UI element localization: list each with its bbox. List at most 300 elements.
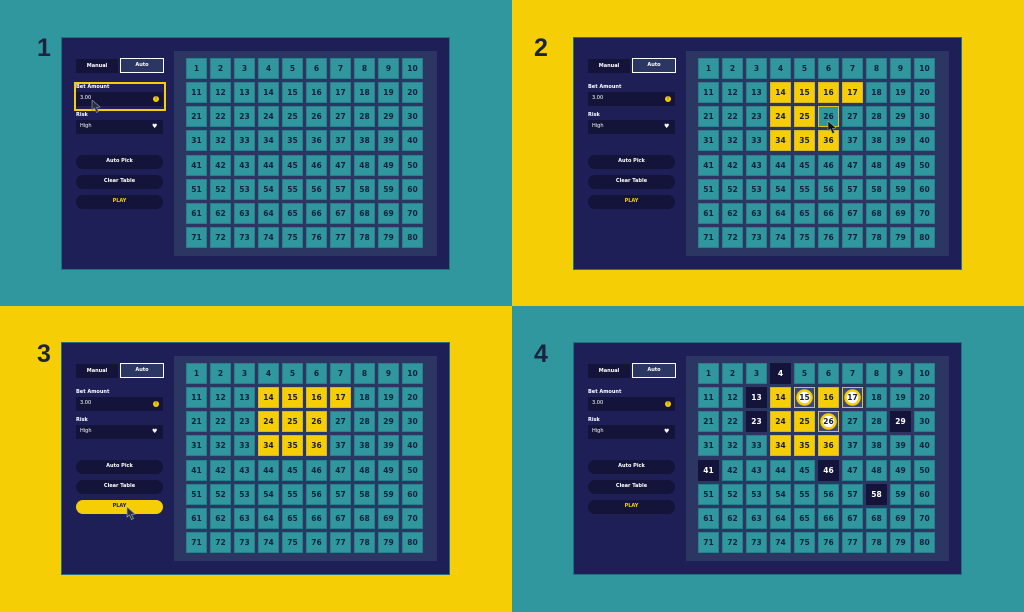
number board with selected numbers: 35 <box>287 441 298 450</box>
number board with drawn results: 32 <box>727 441 738 450</box>
number board with selected numbers: 51 <box>191 490 202 499</box>
number board: 19 <box>383 88 394 97</box>
number board with selected numbers: 41 <box>703 160 714 170</box>
number board: 69 <box>383 209 394 218</box>
number board with selected numbers: 2 <box>730 64 735 73</box>
number board: 64 <box>263 209 274 218</box>
number board: 62 <box>215 209 226 218</box>
number board with drawn results: 76 <box>823 538 834 547</box>
number board with selected numbers: 54 <box>263 490 274 499</box>
number board with drawn results: 59 <box>895 490 906 499</box>
play button: PLAY <box>625 198 638 204</box>
number board with drawn results: 54 <box>775 490 786 499</box>
number board with selected numbers: 62 <box>727 209 738 218</box>
number board with selected numbers: 21 <box>191 417 202 426</box>
number board with selected numbers: 10 <box>407 369 418 378</box>
clear table button <box>588 480 675 494</box>
auto pick button <box>76 155 163 168</box>
bet amount input: 3.00 <box>592 95 603 101</box>
number board with selected numbers: 74 <box>775 233 786 242</box>
number board with selected numbers: 31 <box>191 441 202 450</box>
number board with drawn results: 61 <box>703 514 714 523</box>
number board with selected numbers: 28 <box>359 417 370 426</box>
risk select: ♥ <box>152 123 157 130</box>
number board with selected numbers: 23 <box>751 112 762 121</box>
clear table button: Clear Table <box>616 178 647 184</box>
number board with drawn results: 13 <box>751 393 762 402</box>
number board: 78 <box>359 233 370 242</box>
number board with selected numbers: 4 <box>266 369 271 378</box>
number board with selected numbers: 36 <box>823 136 834 145</box>
number board with drawn results: 40 <box>919 441 930 450</box>
number board with selected numbers: 20 <box>407 393 418 402</box>
panel: step 2 game screen <box>574 38 961 269</box>
number board: 61 <box>191 209 202 218</box>
number board with drawn results: 18 <box>871 393 882 402</box>
number board with drawn results: 35 <box>799 441 810 450</box>
number board with drawn results: 4 <box>778 369 783 378</box>
number board: 12 <box>215 88 226 97</box>
number board with drawn results: 60 <box>919 490 930 499</box>
number board with drawn results: 74 <box>775 538 786 547</box>
auto tab <box>632 58 676 73</box>
number board: 33 <box>239 136 250 145</box>
number board with selected numbers: 67 <box>847 209 858 218</box>
number board: 8 <box>362 64 367 73</box>
number board: 17 <box>335 88 346 97</box>
number board with selected numbers: 75 <box>287 538 298 547</box>
number board with selected numbers: 34 <box>775 136 786 145</box>
number board: 51 <box>191 185 202 194</box>
number board with selected numbers: 17 <box>335 393 346 402</box>
risk select <box>588 425 675 438</box>
number board: 75 <box>287 233 298 242</box>
bet amount input <box>588 397 675 410</box>
number board with selected numbers: 16 <box>823 88 834 97</box>
number board: 46 <box>311 160 322 170</box>
number board: 37 <box>335 136 346 145</box>
number board: 59 <box>383 185 394 194</box>
number board with selected numbers: 4 <box>778 64 783 73</box>
number board with selected numbers: 42 <box>215 466 226 474</box>
auto tab <box>632 363 676 378</box>
number board: 16 <box>311 88 322 97</box>
number board with drawn results: 39 <box>895 441 906 450</box>
step number 3: 3 <box>37 340 51 368</box>
number board with selected numbers: 38 <box>359 441 370 450</box>
manual tab <box>588 59 630 73</box>
auto pick button <box>588 155 675 168</box>
number board with selected numbers: 33 <box>239 441 250 450</box>
number board with drawn results: 43 <box>751 466 762 474</box>
number board with selected numbers: 37 <box>847 136 858 145</box>
icon: mouse cursor <box>92 100 101 113</box>
number board with selected numbers: 23 <box>239 417 250 426</box>
step number 1: 1 <box>37 34 51 62</box>
number board <box>174 51 437 256</box>
number board: 10 <box>407 64 418 73</box>
bet amount label: Bet Amount <box>588 84 621 90</box>
number board with selected numbers: 46 <box>311 466 322 474</box>
number board: 35 <box>287 136 298 145</box>
manual tab <box>76 364 118 378</box>
number board with selected numbers: 55 <box>799 185 810 194</box>
number board with drawn results: 73 <box>751 538 762 547</box>
number board with drawn results: 1 <box>706 369 711 378</box>
number board with selected numbers <box>686 51 949 256</box>
number board with drawn results: 80 <box>919 538 930 547</box>
number board: 71 <box>191 233 202 242</box>
number board with drawn results: 78 <box>871 538 882 547</box>
number board with drawn results: 69 <box>895 514 906 523</box>
number board with drawn results: 38 <box>871 441 882 450</box>
number board with selected numbers: 6 <box>826 64 831 73</box>
number board with selected numbers: 27 <box>847 112 858 121</box>
number board with selected numbers: 35 <box>799 136 810 145</box>
clear table button <box>76 480 163 494</box>
number board with selected numbers: 15 <box>799 88 810 97</box>
number board with selected numbers: 49 <box>383 466 394 474</box>
number board: 31 <box>191 136 202 145</box>
number board with selected numbers: 14 <box>775 88 786 97</box>
number board: 41 <box>191 160 202 170</box>
number board with drawn results: 24 <box>775 417 786 426</box>
manual tab: Manual <box>599 63 619 69</box>
number board: 45 <box>287 160 298 170</box>
number board with selected numbers: 5 <box>802 64 807 73</box>
number board with selected numbers: 77 <box>335 538 346 547</box>
manual tab <box>76 59 118 73</box>
auto tab: Auto <box>647 367 661 373</box>
number board with drawn results: 27 <box>847 417 858 426</box>
number board with selected numbers: 34 <box>263 441 274 450</box>
bet amount label: Bet Amount <box>76 389 109 395</box>
number board: 3 <box>242 64 247 73</box>
number board: 48 <box>359 160 370 170</box>
number board with drawn results: 37 <box>847 441 858 450</box>
number board with selected numbers: 18 <box>359 393 370 402</box>
number board with selected numbers: 5 <box>290 369 295 378</box>
number board with selected numbers: 74 <box>263 538 274 547</box>
number board with selected numbers: 15 <box>287 393 298 402</box>
number board with drawn results: 66 <box>823 514 834 523</box>
number board with selected numbers: 37 <box>335 441 346 450</box>
number board: 76 <box>311 233 322 242</box>
number board: 67 <box>335 209 346 218</box>
number board with selected numbers: 56 <box>311 490 322 499</box>
number board with drawn results: 6 <box>826 369 831 378</box>
bet amount input: ! <box>667 96 669 102</box>
number board with drawn results: 34 <box>775 441 786 450</box>
number board with drawn results: 10 <box>919 369 930 378</box>
number board with selected numbers: 26 <box>311 417 322 426</box>
risk select <box>76 425 163 438</box>
number board with drawn results: 63 <box>751 514 762 523</box>
number board: 68 <box>359 209 370 218</box>
number board: 24 <box>263 112 274 121</box>
number board with drawn results: 58 <box>871 490 882 499</box>
number board: 52 <box>215 185 226 194</box>
number board with drawn results: 65 <box>799 514 810 523</box>
number board with drawn results: 7 <box>850 369 855 378</box>
number board with drawn results: 57 <box>847 490 858 499</box>
number board with drawn results: 68 <box>871 514 882 523</box>
number board with selected numbers: 33 <box>751 136 762 145</box>
auto tab: Auto <box>135 62 149 68</box>
number board with drawn results: 62 <box>727 514 738 523</box>
risk select: High <box>80 123 92 129</box>
number board with selected numbers: 63 <box>751 209 762 218</box>
number board with drawn results: 53 <box>751 490 762 499</box>
number board: 20 <box>407 88 418 97</box>
number board: 9 <box>386 64 391 73</box>
number board with selected numbers: 24 <box>263 417 274 426</box>
number board with drawn results: 30 <box>919 417 930 426</box>
number board with drawn results: 75 <box>799 538 810 547</box>
step number 2: 2 <box>534 34 548 62</box>
number board: 25 <box>287 112 298 121</box>
number board with selected numbers: 12 <box>727 88 738 97</box>
number board with selected numbers: 75 <box>799 233 810 242</box>
number board with selected numbers: 1 <box>194 369 199 378</box>
quadrant 3 background <box>0 306 512 612</box>
bet amount input: 3.00 <box>80 95 91 101</box>
number board with drawn results: 56 <box>823 490 834 499</box>
number board with selected numbers: 60 <box>919 185 930 194</box>
number board with selected numbers <box>174 356 437 561</box>
number board with drawn results: 28 <box>871 417 882 426</box>
number board: 54 <box>263 185 274 194</box>
number board with drawn results: 9 <box>898 369 903 378</box>
number board: 42 <box>215 160 226 170</box>
number board with selected numbers: 18 <box>871 88 882 97</box>
clear table button: Clear Table <box>616 483 647 489</box>
number board with selected numbers: 29 <box>895 112 906 121</box>
number board with drawn results: 55 <box>799 490 810 499</box>
number board with selected numbers: 8 <box>874 64 879 73</box>
number board with selected numbers: 6 <box>314 369 319 378</box>
number board: 47 <box>335 160 346 170</box>
number board: 43 <box>239 160 250 170</box>
bet amount input <box>76 397 163 410</box>
number board with selected numbers: 50 <box>919 160 930 170</box>
bet amount input: 3.00 <box>592 400 603 406</box>
auto pick button: Auto Pick <box>106 463 133 469</box>
number board with selected numbers: 46 <box>823 160 834 170</box>
number board: 72 <box>215 233 226 242</box>
number board with drawn results: 44 <box>775 466 786 474</box>
number board with selected numbers: 62 <box>215 514 226 523</box>
play button: PLAY <box>625 503 638 509</box>
number board: 14 <box>263 88 274 97</box>
clear table button: Clear Table <box>104 178 135 184</box>
panel: step 4 game screen <box>574 343 961 574</box>
number board with drawn results: 71 <box>703 538 714 547</box>
number board with selected numbers: 9 <box>386 369 391 378</box>
auto tab: Auto <box>135 367 149 373</box>
auto pick button <box>588 460 675 474</box>
number board with selected numbers: 29 <box>383 417 394 426</box>
number board: 15 <box>287 88 298 97</box>
number board with selected numbers: 48 <box>871 160 882 170</box>
bet amount input: 3.00 <box>80 400 91 406</box>
number board with selected numbers: 61 <box>191 514 202 523</box>
bet amount input: ! <box>667 401 669 407</box>
number board with selected numbers: 71 <box>191 538 202 547</box>
number board with drawn results: 50 <box>919 466 930 474</box>
number board with selected numbers: 65 <box>799 209 810 218</box>
number board: 23 <box>239 112 250 121</box>
number board with selected numbers: 21 <box>703 112 714 121</box>
number board with selected numbers: 52 <box>215 490 226 499</box>
number board with drawn results: 52 <box>727 490 738 499</box>
panel: step 3 game screen <box>62 343 449 574</box>
number board with selected numbers: 53 <box>239 490 250 499</box>
number board with selected numbers: 11 <box>191 393 202 402</box>
step number 4: 4 <box>534 340 548 368</box>
quadrant 2 background <box>512 0 1024 306</box>
number board with selected numbers: 32 <box>727 136 738 145</box>
auto pick button: Auto Pick <box>618 463 645 469</box>
risk select: High <box>592 123 604 129</box>
number board with selected numbers: 71 <box>703 233 714 242</box>
number board with selected numbers: 60 <box>407 490 418 499</box>
number board with drawn results: 79 <box>895 538 906 547</box>
number board with selected numbers: 43 <box>751 160 762 170</box>
number board with selected numbers: 42 <box>727 160 738 170</box>
number board with drawn results: 49 <box>895 466 906 474</box>
number board with selected numbers: 12 <box>215 393 226 402</box>
number board: 63 <box>239 209 250 218</box>
bet amount input: ! <box>155 96 157 102</box>
number board with selected numbers: 58 <box>871 185 882 194</box>
number board: 2 <box>218 64 223 73</box>
number board with drawn results: 67 <box>847 514 858 523</box>
number board with selected numbers: 68 <box>871 209 882 218</box>
number board with drawn results: 16 <box>823 393 834 402</box>
number board with selected numbers: 24 <box>775 112 786 121</box>
number board with selected numbers: 73 <box>239 538 250 547</box>
number board with drawn results: 36 <box>823 441 834 450</box>
number board with selected numbers: 41 <box>191 466 202 474</box>
number board with drawn results: 19 <box>895 393 906 402</box>
number board: 21 <box>191 112 202 121</box>
quadrant 1 background <box>0 0 512 306</box>
number board with selected numbers: 78 <box>871 233 882 242</box>
number board with selected numbers: 30 <box>407 417 418 426</box>
number board with selected numbers: 45 <box>799 160 810 170</box>
number board with selected numbers: 13 <box>239 393 250 402</box>
number board with drawn results: 3 <box>754 369 759 378</box>
number board with drawn results: 77 <box>847 538 858 547</box>
number board: 32 <box>215 136 226 145</box>
number board with selected numbers: 66 <box>823 209 834 218</box>
number board with selected numbers: 76 <box>311 538 322 547</box>
risk select <box>588 120 675 134</box>
number board with drawn results: 8 <box>874 369 879 378</box>
auto tab <box>120 58 164 73</box>
number board with selected numbers: 69 <box>383 514 394 523</box>
number board with selected numbers: 17 <box>847 88 858 97</box>
clear table button <box>76 175 163 188</box>
number board with selected numbers: 72 <box>727 233 738 242</box>
number board with selected numbers: 30 <box>919 112 930 121</box>
number board with drawn results: 2 <box>730 369 735 378</box>
number board with selected numbers: 48 <box>359 466 370 474</box>
number board: 11 <box>191 88 202 97</box>
number board with selected numbers: 19 <box>895 88 906 97</box>
number board with selected numbers: 70 <box>407 514 418 523</box>
risk select: High <box>592 428 604 434</box>
number board with drawn results: 15 <box>799 393 810 402</box>
number board: 6 <box>314 64 319 73</box>
number board with drawn results <box>686 356 949 561</box>
number board: 28 <box>359 112 370 121</box>
number board with selected numbers: 22 <box>727 112 738 121</box>
number board with drawn results: 45 <box>799 466 810 474</box>
number board with selected numbers: 57 <box>847 185 858 194</box>
number board with selected numbers: 8 <box>362 369 367 378</box>
number board with drawn results: 21 <box>703 417 714 426</box>
risk label: Risk <box>76 112 88 118</box>
number board: 13 <box>239 88 250 97</box>
number board: 7 <box>338 64 343 73</box>
number board with selected numbers: 67 <box>335 514 346 523</box>
number board with selected numbers: 14 <box>263 393 274 402</box>
risk select: ♥ <box>664 123 669 130</box>
number board with selected numbers: 13 <box>751 88 762 97</box>
number board with selected numbers: 79 <box>383 538 394 547</box>
number board with selected numbers: 1 <box>706 64 711 73</box>
number board with selected numbers: 43 <box>239 466 250 474</box>
number board with selected numbers: 63 <box>239 514 250 523</box>
bet amount input <box>76 92 163 106</box>
number board with selected numbers: 49 <box>895 160 906 170</box>
number board with selected numbers: 39 <box>383 441 394 450</box>
risk select: ♥ <box>664 428 669 435</box>
number board with drawn results: 5 <box>802 369 807 378</box>
number board with selected numbers: 44 <box>775 160 786 170</box>
number board with selected numbers: 54 <box>775 185 786 194</box>
number board with drawn results: 46 <box>823 466 834 474</box>
number board with selected numbers: 2 <box>218 369 223 378</box>
auto tab: Auto <box>647 62 661 68</box>
number board with selected numbers: 68 <box>359 514 370 523</box>
number board: 53 <box>239 185 250 194</box>
number board with selected numbers: 10 <box>919 64 930 73</box>
number board with drawn results: 64 <box>775 514 786 523</box>
number board: 29 <box>383 112 394 121</box>
number board with drawn results: 20 <box>919 393 930 402</box>
number board with drawn results: 12 <box>727 393 738 402</box>
number board with selected numbers: 28 <box>871 112 882 121</box>
quadrant 4 background <box>512 306 1024 612</box>
bet amount label: Bet Amount <box>76 84 109 90</box>
auto tab <box>120 363 164 378</box>
play button <box>588 500 675 514</box>
number board with selected numbers: 58 <box>359 490 370 499</box>
number board with selected numbers: 73 <box>751 233 762 242</box>
number board with drawn results: 72 <box>727 538 738 547</box>
number board: 30 <box>407 112 418 121</box>
number board with selected numbers: 80 <box>407 538 418 547</box>
number board with selected numbers: 39 <box>895 136 906 145</box>
risk label: Risk <box>588 112 600 118</box>
number board: 26 <box>311 112 322 121</box>
risk label: Risk <box>588 417 600 423</box>
risk select <box>76 120 163 134</box>
number board with drawn results: 51 <box>703 490 714 499</box>
